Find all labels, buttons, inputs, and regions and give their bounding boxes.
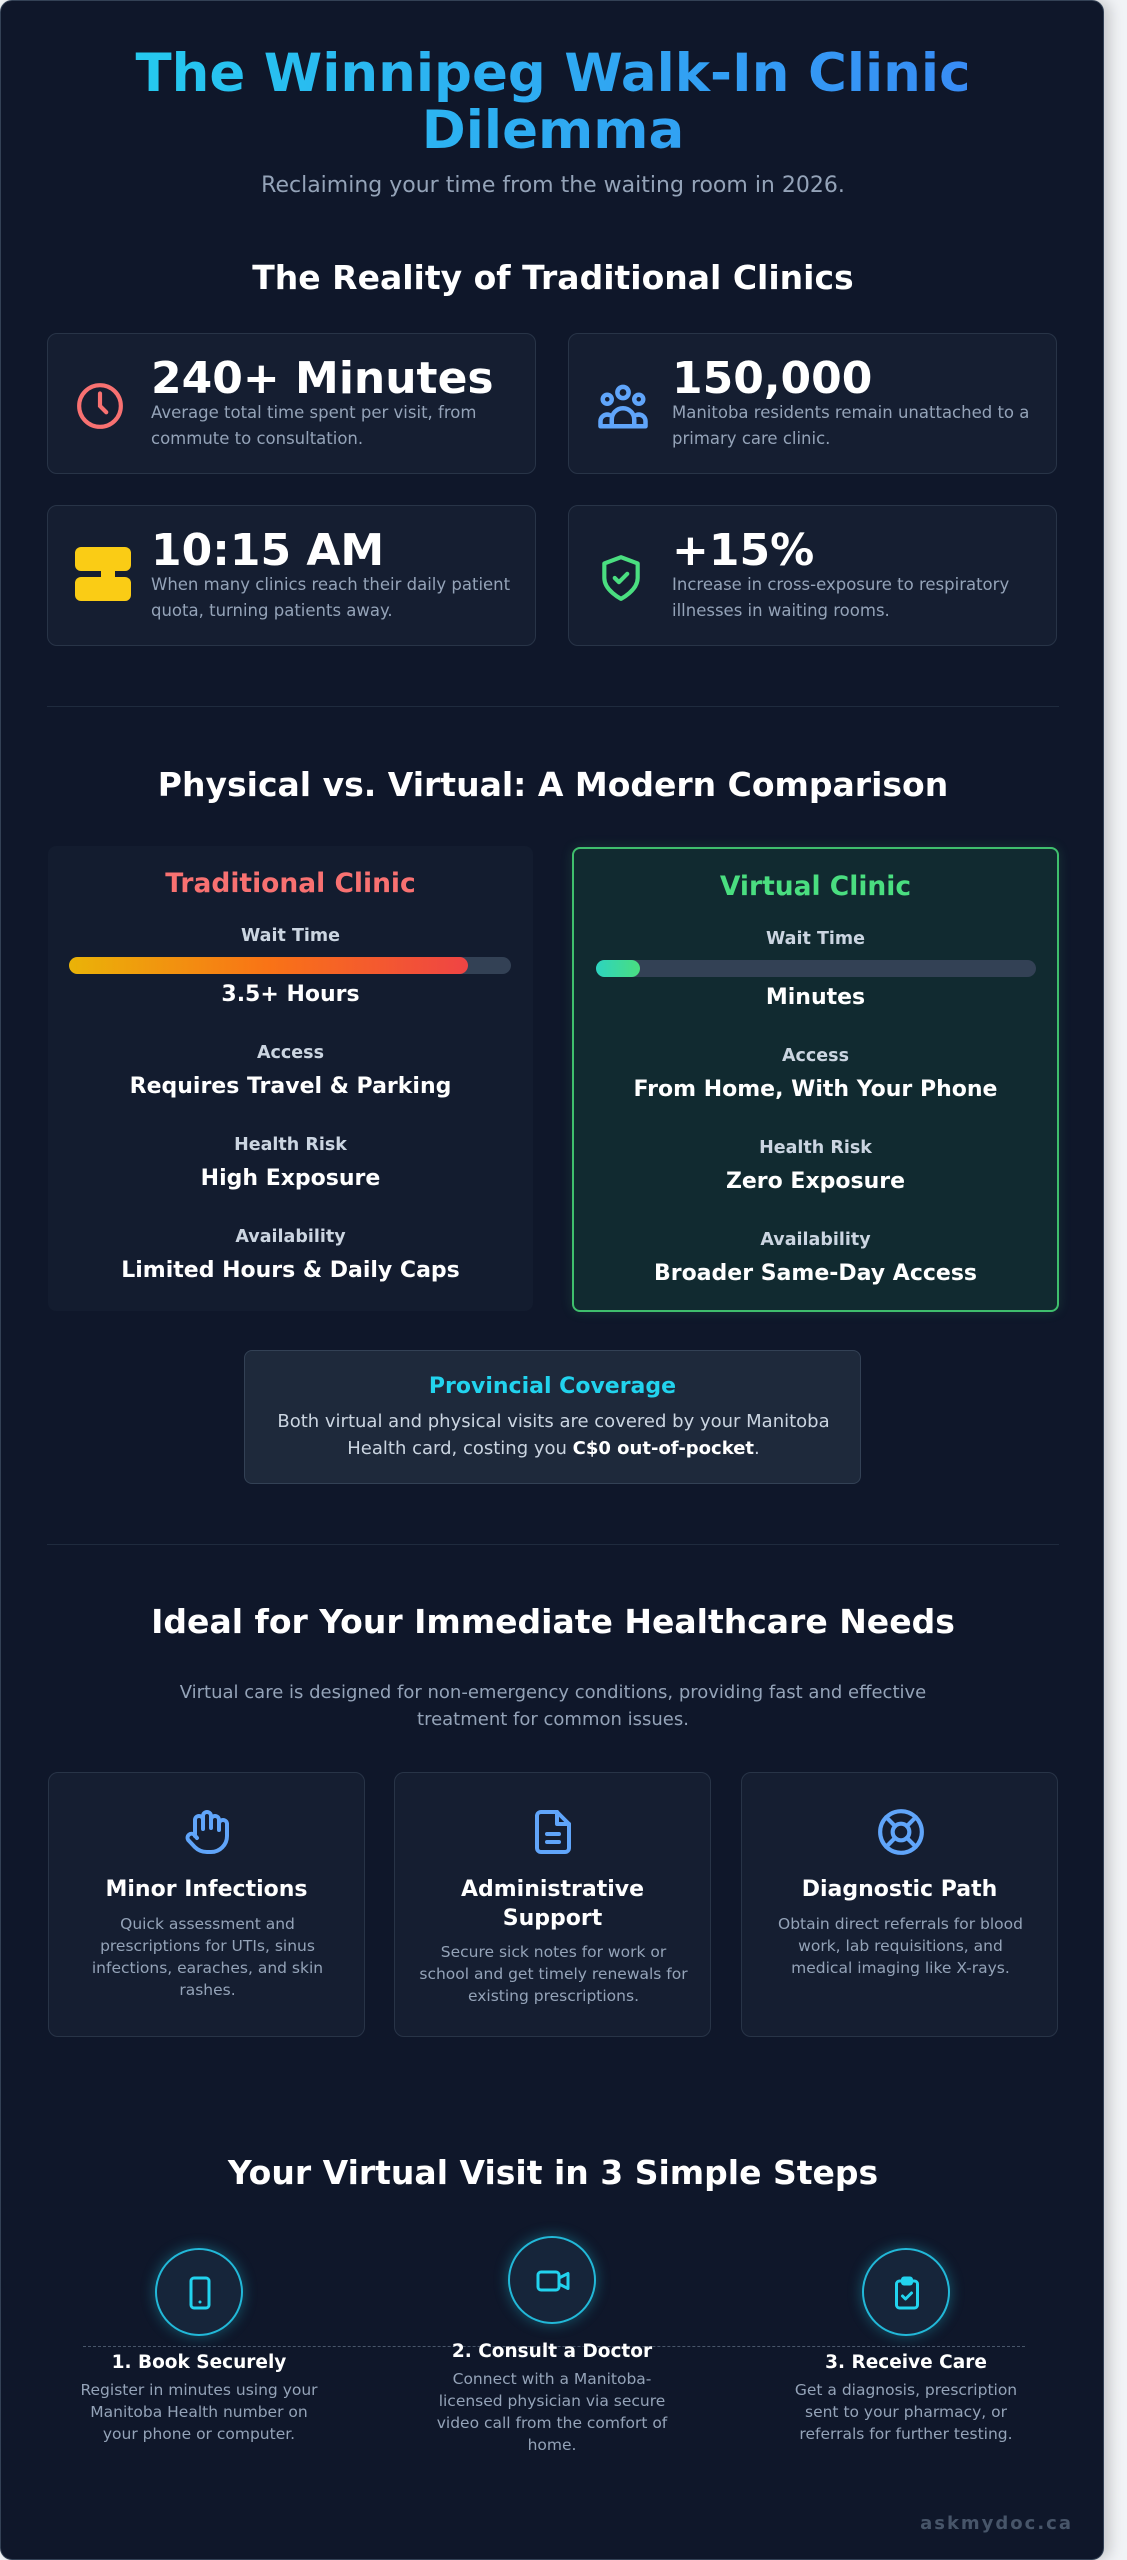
stat: exposure (568, 505, 1057, 646)
callout: provincial coverage: Both virtual and physical visits are covered by your Manitoba Health card, costing you C$0 out-of-pocket. (277, 1411, 830, 1459)
stat: 10:15: When many clinics reach their daily patient quota, turning patients away. (151, 575, 510, 620)
step 1 text: Register in minutes using your Manitoba Health number on your phone or computer. (80, 2381, 318, 2443)
step 1 text (80, 2352, 318, 2443)
stat: exposure: +15% (672, 525, 814, 576)
card: administrative: Administrative (461, 1877, 644, 1902)
panel: traditional: 3.5+ Hours (221, 982, 360, 1007)
title: The Winnipeg Walk-In Clinic (135, 43, 970, 104)
stat: 10:15 (47, 505, 536, 646)
icon: hand (186, 1810, 229, 1854)
card: diagnostic (741, 1772, 1058, 2037)
card: minor infections: Minor Infections (105, 1877, 308, 1902)
panel: traditional: High Exposure (201, 1166, 380, 1191)
step 1 text: 1. Book Securely (112, 2352, 286, 2373)
card: minor infections (48, 1772, 365, 2037)
panel: traditional: Access (257, 1043, 324, 1063)
stat: residents: Manitoba residents remain unattached to a primary care clinic. (672, 403, 1029, 448)
card: minor infections: Quick assessment and prescriptions for UTIs, sinus infections, earaches, and skin rashes. (92, 1915, 323, 1999)
icon: phone (190, 2276, 210, 2310)
card: diagnostic: Obtain direct referrals for blood work, lab requisitions, and medical imaging like X-rays. (778, 1915, 1023, 1977)
icon: video (536, 2270, 570, 2292)
icon: clipboard check (895, 2276, 919, 2310)
footer brand: askmydoc.ca (920, 2513, 1073, 2534)
step 2 circle (508, 2236, 596, 2324)
panel: virtual: Zero Exposure (726, 1169, 905, 1194)
icon: lifebuoy (878, 1809, 924, 1855)
stat: minutes: 240+ Minutes (151, 353, 494, 404)
panel: virtual: Minutes (766, 985, 865, 1010)
icon: users (598, 384, 648, 428)
panel: traditional: Availability (235, 1227, 346, 1247)
icon: hourglass blocks (75, 547, 131, 601)
stat: residents: 150,000 (672, 353, 872, 404)
card: administrative: Support (503, 1906, 602, 1931)
heading: comparison: Physical vs. Virtual: A Modern Comparison (158, 765, 948, 804)
stat: 10:15: 10:15 AM (151, 525, 384, 576)
callout: provincial coverage: Provincial Coverage (429, 1374, 676, 1399)
panel: virtual: Access (782, 1046, 849, 1066)
step 3 circle (862, 2248, 950, 2336)
card: administrative: Secure sick notes for work or school and get timely renewals for existing prescriptions. (419, 1943, 688, 2005)
icon: document (535, 1810, 571, 1854)
step 1 circle (155, 2248, 243, 2336)
panel: traditional: Health Risk (234, 1135, 347, 1155)
panel: virtual: Wait Time (766, 929, 865, 949)
heading: reality: The Reality of Traditional Clinics (252, 258, 854, 297)
panel: virtual: Availability (760, 1230, 871, 1250)
step 2 text: Connect with a Manitoba-licensed physician via secure video call from the comfort of home. (437, 2370, 667, 2454)
panel title: Virtual Clinic (720, 871, 911, 902)
icon: shield check (602, 555, 640, 601)
panel: traditional: Wait Time (241, 926, 340, 946)
stat: minutes: Average total time spent per visit, from commute to consultation. (151, 403, 476, 448)
text: needs intro: Virtual care is designed for non-emergency conditions, providing fast and effective treatment for common issues. (180, 1682, 926, 1730)
stat: exposure: Increase in cross-exposure to respiratory illnesses in waiting rooms. (672, 575, 1009, 620)
stat: residents (568, 333, 1057, 474)
panel: traditional (48, 846, 533, 1311)
panel: traditional: Requires Travel & Parking (130, 1074, 451, 1099)
panel: virtual: Health Risk (759, 1138, 872, 1158)
heading: steps: Your Virtual Visit in 3 Simple Steps (228, 2153, 878, 2192)
panel: virtual: From Home, With Your Phone (634, 1077, 997, 1102)
panel: traditional: Limited Hours & Daily Caps (121, 1258, 460, 1283)
icon: clock (77, 383, 123, 429)
step 2 text: 2. Consult a Doctor (452, 2341, 652, 2362)
subtitle: Reclaiming your time from the waiting room in 2026. (261, 173, 845, 198)
stat: minutes (47, 333, 536, 474)
step 3 text: Get a diagnosis, prescription sent to your pharmacy, or referrals for further testing. (795, 2381, 1017, 2443)
bar: wait time (69, 957, 511, 974)
step 3 text: 3. Receive Care (825, 2352, 987, 2373)
panel: virtual (572, 847, 1059, 1312)
card: diagnostic: Diagnostic Path (802, 1877, 997, 1902)
panel: virtual: Broader Same-Day Access (654, 1261, 977, 1286)
step 3 text (795, 2352, 1017, 2443)
callout: provincial coverage (244, 1350, 861, 1484)
title: Dilemma (422, 100, 684, 161)
heading: needs: Ideal for Your Immediate Healthcare Needs (151, 1602, 955, 1641)
title (1, 45, 1105, 159)
bar: wait time (596, 960, 1036, 977)
panel title: Traditional Clinic (165, 868, 416, 899)
card: administrative (394, 1772, 711, 2037)
